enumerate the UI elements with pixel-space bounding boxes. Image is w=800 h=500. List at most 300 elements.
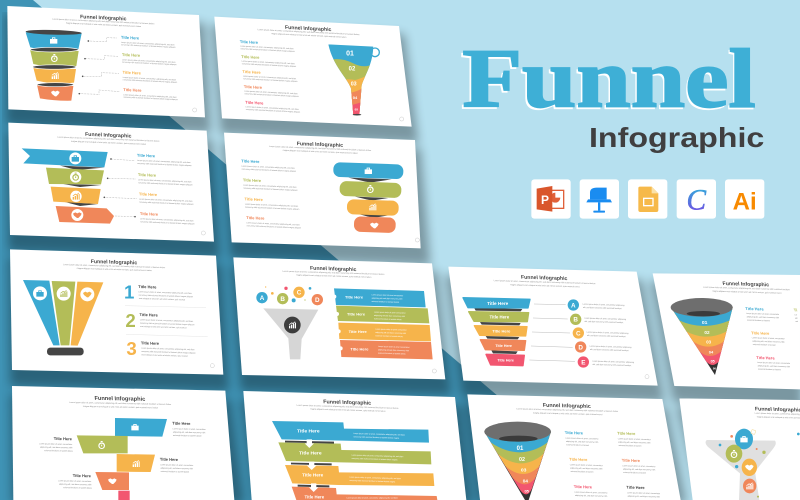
- title: Funnel: Funnel: [462, 33, 756, 125]
- stacked title panels: Title Here: [350, 346, 369, 351]
- text block 3: euismod tincidunt ut laoreet: [570, 470, 594, 474]
- text block 2: Lorem ipsum dolor sit amet, consectetur adipiscing elit, sed diam: [138, 178, 192, 183]
- stacked title panels: Title Here: [349, 329, 368, 334]
- heading: Lorem ipsum dolor sit amet, consectetur adipiscing elit, sed diam nonummy nibh euismod tincidunt ut laoreet dolore: [516, 407, 619, 413]
- text block 2: [241, 54, 297, 68]
- text block 3: [242, 69, 298, 83]
- stacked title panels: Lorem ipsum dolor sit amet consectetur: [374, 311, 406, 315]
- text block 2: Title Here: [122, 52, 141, 58]
- text block right 1: Lorem ipsum dolor sit amet, consectetur: [173, 427, 206, 431]
- text block left 1: [39, 436, 74, 453]
- text block 1: Title Here: [745, 306, 765, 312]
- text block 1: Lorem ipsum dolor sit amet, consectetur adipiscing elit, sed diam: [137, 159, 191, 164]
- flask funnel: 01: [346, 51, 354, 58]
- text block 1: nonummy nibh euismod tincidunt ut laoreet dolore magna aliquam: [242, 168, 297, 173]
- heading: Lorem ipsum dolor sit amet, consectetur adipiscing elit, sed diam nonummy nibh euismod tincidunt: [703, 286, 790, 291]
- text block 3: Lorem ipsum dolor sit amet, consectetur: [757, 361, 791, 365]
- text block 5: Lorem ipsum dolor sit amet, consectetur: [574, 491, 608, 494]
- text block 2: Title Here: [139, 312, 159, 318]
- stacked title panels: Lorem ipsum dolor sit amet consectetur: [378, 345, 410, 349]
- ribbon funnel: [22, 148, 114, 224]
- heading: Lorem ipsum dolor sit amet, consectetur adipiscing elit, sed diam nonummy nibh euismod tincidunt ut laoreet dolore: [63, 263, 166, 269]
- heading: [296, 398, 400, 413]
- text block 2: euismod tincidunt ut laoreet: [753, 343, 776, 347]
- cone: 02: [704, 330, 710, 335]
- text block 3: [141, 340, 196, 358]
- icon: Keynote: [580, 179, 619, 219]
- heading: Funnel Infographic: [94, 396, 146, 403]
- text block 3: nonummy nibh euismod tincidunt ut laoreet dolore magna aliquam: [245, 206, 300, 211]
- text block left 2: adipiscing elit, sed diam nonummy nibh: [59, 483, 92, 486]
- text block 4: Lorem ipsum dolor sit amet, consectetur: [622, 464, 656, 468]
- heading: Funnel Infographic: [285, 25, 332, 33]
- heading: magna aliquam erat volutpat ut wisi enim ad minim veniam, quis nostrud exerci tation: [71, 140, 146, 146]
- text block 2: Title Here: [243, 177, 262, 183]
- text block 2: Lorem ipsum dolor sit amet, consectetur: [752, 336, 785, 340]
- text block 1: [241, 158, 297, 173]
- text block 1: nonummy nibh euismod tincidunt ut laoreet dolore magna aliquam: [240, 47, 295, 53]
- cone: 04: [523, 479, 528, 484]
- stepped bars: [272, 421, 437, 500]
- text block 5: Title Here: [245, 100, 264, 106]
- stacked bars: Title Here: [492, 329, 511, 334]
- text block 5: [574, 484, 608, 498]
- text block 2: Title Here: [617, 431, 636, 436]
- text block 1: Lorem ipsum dolor sit amet, consectetur: [746, 312, 780, 316]
- stepped bars: Title Here: [299, 451, 322, 457]
- stacked title panels: Title Here: [345, 295, 364, 300]
- heading: Funnel Infographic: [543, 403, 591, 410]
- icon: Canva: C: [687, 184, 707, 216]
- leader lines: [103, 158, 137, 217]
- text block 1: [137, 153, 192, 167]
- text block 4: nonummy nibh euismod tincidunt ut laoreet dolore magna aliquam: [123, 96, 178, 101]
- text block 4: [622, 458, 657, 475]
- heading: Lorem ipsum dolor sit amet, consectetur adipiscing elit, sed diam nonummy nibh euismod tincidunt ut laoreet dolore: [296, 404, 400, 410]
- lettered circles: [568, 299, 589, 368]
- text block right 2: Title Here: [160, 457, 179, 462]
- cone: 02: [519, 457, 525, 463]
- text block 3: nonummy nibh euismod tincidunt ut laoreet dolore magna aliquam: [123, 78, 178, 84]
- text block 4: euismod tincidunt ut laoreet: [623, 471, 647, 475]
- panel: slide 8 stepped bars: [243, 391, 466, 500]
- cone: 03: [521, 468, 527, 474]
- text block 2: Lorem ipsum dolor sit amet, consectetur: [618, 437, 651, 441]
- text block left 2: [58, 473, 93, 490]
- panel: slide 3 ribbon funnel: [8, 123, 214, 242]
- cone: 05: [711, 359, 715, 363]
- grey funnel: [263, 308, 318, 359]
- text block 1: [121, 35, 176, 49]
- text block 2: [122, 52, 177, 66]
- heading: magna aliquam erat volutpat ut wisi enim ad minim veniam, quis nostrud exerci tation: [77, 267, 152, 272]
- heading: Funnel Infographic: [80, 14, 127, 22]
- text block 2: [139, 312, 195, 330]
- text block 4: eui: [795, 321, 799, 323]
- text block 5: [245, 100, 301, 114]
- text block 4: Lorem ipsum dolor sit amet, consectetur adipiscing elit, sed diam: [244, 90, 298, 95]
- text block 2: nonummy nibh euismod tincidunt ut laoreet dolore magna aliquam: [242, 62, 297, 68]
- stacked title panels: Title Here: [347, 312, 366, 317]
- text block 1: euismod tincidunt ut laoreet: [566, 443, 590, 447]
- text block 1: erat volutpat ut wisi enim ad minim veniam, quis nostrud: [139, 297, 185, 301]
- text block 2: [138, 172, 193, 187]
- heading: [282, 265, 386, 279]
- lettered circles: D: [578, 344, 583, 351]
- stepped bars: Title Here: [297, 429, 320, 435]
- text block 1: Title Here: [240, 39, 259, 45]
- heading: magna aliquam erat volutpat ut wisi enim ad minim veniam, quis nostrud exerci tation: [83, 405, 158, 409]
- heading: Lorem ipsum dolor sit amet, consectetur adipiscing elit, sed diam nonummy nibh euismod tincidunt ut laoreet dolore: [282, 270, 385, 276]
- text block 2: adipiscing elit, sed diam nonummy nibh: [752, 340, 785, 344]
- cone: 01: [517, 446, 524, 452]
- text block 2: nonummy nibh euismod tincidunt ut laoreet dolore magna aliquam: [138, 181, 193, 187]
- text block 3: Title Here: [242, 69, 262, 75]
- heading: [69, 395, 172, 410]
- text block 5: Lorem ipsum dolor sit amet, consectetur adipiscing elit, sed diam: [245, 105, 299, 111]
- cone: 04: [709, 349, 714, 354]
- body text rows: Lorem ipsum dolor sit amet, consectetur adipiscing: [582, 303, 625, 307]
- stacked title panels: [332, 288, 433, 359]
- text block 4: nonummy nibh euismod tincidunt ut laoreet dolore magna aliquam: [247, 224, 302, 230]
- body text rows: elit, sed diam nonummy nibh euismod tincidunt: [592, 363, 632, 367]
- heading: magna aliquam erat volutpat ut wisi enim ad minim veniam, quis nostrud exerci tation: [310, 408, 386, 413]
- heading: Lorem ipsum dolor sit amet, consectetur adipiscing elit, sed diam nonummy nibh euismod tincidunt ut laoreet dolore: [69, 401, 172, 406]
- body text rows: Lorem ipsum dolor sit amet, consectetur adipiscing: [592, 360, 634, 364]
- heading: [269, 140, 372, 155]
- text block 6: Title Here: [626, 485, 646, 490]
- body text rows: elit, sed diam nonummy nibh euismod tincidunt: [587, 334, 626, 338]
- text block 5: Title Here: [574, 484, 593, 489]
- flask funnel: 04: [353, 95, 358, 100]
- text block 1: euismod tincidunt ut laoreet: [747, 319, 771, 322]
- text block 2: Lorem ipsum dolor sit amet, consectetur adipiscing elit, sed diam: [243, 184, 297, 189]
- heading: Lorem ipsum dolor sit amet, consectetur adipiscing elit, sed diam nonummy nibh euismod tincidunt ut laoreet dolore: [494, 279, 597, 285]
- cone: 01: [702, 320, 708, 326]
- text block right 1: euismod tincidunt ut laoreet dolore: [173, 434, 202, 438]
- text block 1: Title Here: [138, 284, 157, 290]
- text block right 1: adipiscing elit, sed diam nonummy nibh: [173, 431, 205, 434]
- text block 3: euismod tincidunt ut laoreet: [758, 368, 782, 371]
- panel: slide 11 large cone funnel: [467, 394, 681, 500]
- text block 1: Title Here: [121, 35, 140, 41]
- heading: magna aliquam erat volutpat ut wisi enim ad minim veniam, quis nostrud exerci tation: [271, 32, 346, 39]
- text block 6: [626, 485, 661, 498]
- heading: [63, 258, 166, 273]
- text block 4: Title Here: [244, 84, 263, 90]
- cone: 03: [706, 339, 712, 344]
- heading: magna aliquam erat volutpat ut wisi enim ad minim veniam, quis nostrud exerci tation: [283, 149, 358, 155]
- lettered circles: B: [573, 317, 578, 324]
- text block 1: Lorem ipsum dolor sit amet, consectetur adipiscing elit, sed diam: [241, 165, 295, 170]
- text block 2: Title Here: [241, 54, 260, 60]
- text block 3: Lorem ipsum dolor sit amet, consectetur adipiscing elit, sed diam: [139, 198, 193, 203]
- cone: 06: [713, 366, 716, 370]
- connector lines: [529, 304, 575, 361]
- text block 3: Title Here: [141, 340, 160, 346]
- text block 1: Lorem ipsum dolor sit amet, consectetur: [565, 437, 599, 440]
- text block 1: adipiscing elit, sed diam nonummy nibh: [566, 440, 598, 444]
- text block 1: adipiscing elit, sed diam nonummy nibh: [746, 315, 779, 319]
- text block 2: Title Here: [751, 330, 770, 336]
- lettered circles: E: [581, 359, 585, 366]
- heading: Funnel Infographic: [310, 266, 357, 273]
- lettered circles: A: [260, 295, 265, 302]
- stacked title panels: adipiscing elit sed diam nonummy nibh: [374, 314, 405, 318]
- subtitle: Infographic: Infographic: [589, 122, 764, 153]
- text block right 2: euismod tincidunt ut laoreet dolore: [161, 470, 189, 474]
- flask funnel: 03: [351, 82, 357, 88]
- text block 2: adipiscing elit, sed diam nonummy nibh: [618, 441, 651, 444]
- text block 3: nonummy nibh euismod tincidunt ut laoreet dolore magna aliquam: [243, 77, 298, 83]
- text block 6: adipiscing elit, sed diam nonummy nibh: [627, 495, 660, 498]
- text block 1: [745, 306, 781, 323]
- title: Funnel: Funnel: [460, 35, 754, 127]
- text block left 1: Title Here: [54, 436, 73, 441]
- stacked title panels: euismod tincidunt ut laoreet dolore: [378, 352, 405, 355]
- panel: slide 10 cone funnel: [653, 273, 800, 389]
- text block 3: erat volutpat ut wisi enim ad minim veniam, quis nostrud: [141, 353, 188, 358]
- text block 3: [569, 457, 604, 474]
- text block 2: [751, 330, 786, 347]
- stacked title panels: adipiscing elit sed diam nonummy nibh: [378, 348, 409, 352]
- heading: Lorem ipsum dolor sit amet, consectetur adipiscing elit, sed diam nonummy nibh euismod tincidunt ut laoreet dolore: [269, 145, 372, 152]
- text block 2: euismod tincidunt ut laoreet: [618, 444, 642, 448]
- funnel: [26, 29, 82, 101]
- stepped bars: nonummy nibh euismod tincidunt ut laoreet dolore magna: [353, 435, 399, 440]
- flask funnel: [328, 44, 380, 116]
- numeral 3: 3: [126, 338, 137, 359]
- text block 4: Title Here: [246, 215, 265, 221]
- text block right 1: [172, 421, 207, 438]
- heading: Funnel Infographic: [85, 132, 132, 140]
- text block 5: adipiscing elit, sed diam nonummy nibh: [575, 494, 607, 498]
- heading: Lorem ipsum dolor sit amet, consectetur adipiscing elit, sed diam nonummy nibh euismod tincidunt ut laoreet dolore: [257, 28, 360, 36]
- stepped bars: Lorem ipsum dolor sit amet, consectetur adipiscing elit, sed diam: [347, 497, 398, 500]
- blade funnel: [23, 280, 103, 355]
- text block 4: nonummy nibh euismod tincidunt ut laoreet dolore magna aliquam: [244, 92, 299, 98]
- text block 3: Title Here: [123, 70, 142, 76]
- lettered circles: A: [571, 302, 576, 309]
- text block 3: Title Here: [139, 191, 158, 197]
- text block 4: [246, 215, 302, 230]
- heading: magna aliquam erat volutpat ut wisi enim ad minim veniam, quis nostrud exerci: [510, 283, 580, 288]
- panel: slide 12 funnel with icon bubbles: [679, 398, 800, 500]
- icon: Illustrator: [725, 179, 764, 219]
- text block left 1: euismod tincidunt ut laoreet dolore: [44, 449, 73, 453]
- text block 2: nonummy nibh euismod tincidunt ut laoreet dolore magna aliquam: [243, 187, 298, 192]
- text block 1: nonummy nibh euismod tincidunt ut laoreet dolore magna aliquam: [139, 294, 194, 298]
- text block 3: [139, 191, 194, 206]
- stacked title panels: adipiscing elit sed diam nonummy nibh: [375, 331, 406, 335]
- text block 1: Title Here: [137, 153, 156, 158]
- heading: magna aliquam erat volutpat ut wisi enim ad minim veniam, quis nostrud exerci tation: [66, 22, 141, 28]
- text block 1: nonummy nibh euismod tincidunt ut laoreet dolore magna aliquam: [137, 162, 192, 167]
- text block 4: Title Here: [622, 458, 641, 463]
- text block 3: Lorem ipsum dolor sit amet, consectetur adipiscing elit, sed diam: [245, 203, 299, 208]
- staggered bands: [77, 418, 167, 500]
- icon: PowerPoint: [531, 179, 571, 219]
- heading: [57, 131, 160, 146]
- text block 6: Lorem ipsum dolor sit amet, consectetur: [627, 491, 661, 495]
- flask funnel: 02: [349, 67, 356, 73]
- text block 2: [243, 177, 298, 192]
- text block 3: Lorem ipsum dolor sit amet, consectetur adipiscing elit, sed diam: [123, 76, 177, 82]
- pill funnel: [333, 162, 404, 233]
- numeral 1: 1: [124, 282, 134, 303]
- text block left 2: euismod tincidunt ut laoreet dolore: [63, 486, 92, 490]
- heading: Funnel Infographic: [521, 275, 568, 282]
- text block 4: Lor: [794, 314, 798, 316]
- stacked bars: Title Here: [497, 358, 514, 362]
- text block 1: [138, 284, 194, 302]
- text block 2: Lorem ipsum dolor sit amet, consectetur adipiscing elit, sed diam: [241, 60, 295, 65]
- text block 2: Lorem ipsum dolor sit amet, consectetur adipiscing elit, sed diam: [140, 318, 194, 323]
- stepped bars: nonummy nibh euismod tincidunt ut laoreet dolore magna: [352, 457, 397, 461]
- text block 3: Lorem ipsum dolor sit amet, consectetur adipiscing elit, sed diam: [141, 347, 195, 351]
- heading: Funnel Infographic: [91, 259, 137, 266]
- text block 1: Lorem ipsum dolor sit amet, consectetur adipiscing elit, sed diam: [240, 45, 294, 50]
- heading: [257, 24, 361, 40]
- heading: [516, 402, 620, 417]
- stepped bars: Title Here: [302, 473, 324, 478]
- text block 1: nonummy nibh euismod tincidunt ut laoreet dolore magna aliquam: [121, 43, 176, 49]
- background: dark blue diagonal: [0, 0, 620, 500]
- cone: [671, 298, 733, 375]
- text block 3: nonummy nibh euismod tincidunt ut laoreet dolore magna aliquam: [139, 201, 194, 206]
- stacked bars: Title Here: [487, 301, 509, 306]
- flask funnel: 05: [355, 107, 358, 111]
- text block 2: erat volutpat ut wisi enim ad minim veniam, quis nostrud: [140, 325, 186, 329]
- heading: magna aliquam erat volutpat ut wisi enim ad minim veniam, quis nostrud exerci tation: [296, 274, 371, 279]
- body text rows: elit, sed diam nonummy nibh euismod tincidunt: [584, 320, 624, 324]
- lettered circles: B: [280, 296, 285, 303]
- text block 4: Lorem ipsum dolor sit amet, consectetur adipiscing elit, sed diam: [123, 93, 177, 99]
- heading: Funnel Infographic: [722, 281, 770, 288]
- text block left 1: adipiscing elit, sed diam nonummy nibh: [40, 446, 73, 449]
- text block right 2: Lorem ipsum dolor sit amet, consectetur: [160, 463, 194, 467]
- text block 4: adipiscing elit, sed diam nonummy nibh: [623, 468, 655, 471]
- stacked title panels: adipiscing elit sed diam nonummy nibh: [372, 297, 403, 301]
- text block right 2: [160, 457, 194, 474]
- heading: magna aliquam erat volutpat ut wisi enim ad minim veniam, quis nostrud exerci: [533, 411, 603, 416]
- stepped bars: Lorem ipsum dolor sit amet, consectetur adipiscing elit, sed diam: [352, 454, 404, 458]
- panel: slide 5 numbered funnel: [10, 249, 223, 375]
- icon: Google Slides: [628, 179, 667, 219]
- text block 1: [565, 430, 600, 447]
- text block left 2: Lorem ipsum dolor sit amet, consectetur: [58, 479, 92, 483]
- body text rows: Lorem ipsum dolor sit amet, consectetur adipiscing: [584, 317, 626, 321]
- text block 3: Title Here: [244, 196, 264, 202]
- text block 3: [244, 196, 300, 211]
- text block 1: Lorem ipsum dolor sit amet, consectetur adipiscing elit, sed diam: [121, 41, 175, 47]
- text block 3: Lorem ipsum dolor sit amet, consectetur adipiscing elit, sed diam: [243, 75, 297, 80]
- stepped bars: Lorem ipsum dolor sit amet, consectetur adipiscing elit, sed diam: [349, 476, 401, 480]
- text block left 1: Lorem ipsum dolor sit amet, consectetur: [39, 442, 73, 446]
- text block 2: [617, 431, 652, 448]
- stacked title panels: Lorem ipsum dolor sit amet consectetur: [372, 293, 404, 297]
- panel: slide 2 flask funnel: [214, 17, 412, 133]
- lettered circles: C: [576, 330, 581, 337]
- body text rows: Lorem ipsum dolor sit amet, consectetur adipiscing: [586, 331, 629, 335]
- text block right 1: Title Here: [172, 421, 191, 426]
- heading: [702, 280, 791, 295]
- stepped bars: Title Here: [305, 495, 325, 500]
- text block 1: [240, 39, 295, 53]
- stacked bars: [463, 298, 530, 366]
- text block 3: [123, 70, 178, 84]
- text block 3: Lorem ipsum dolor sit amet, consectetur: [570, 463, 603, 467]
- text block 4: Lorem ipsum dolor sit amet, consectetur adipiscing elit, sed diam: [246, 221, 300, 226]
- text block 4: [123, 87, 178, 101]
- lettered circles: [256, 286, 323, 305]
- stacked title panels: euismod tincidunt ut laoreet dolore: [374, 317, 401, 321]
- stacked title panels: euismod tincidunt ut laoreet dolore: [375, 334, 403, 338]
- leader lines: [78, 38, 120, 94]
- icon: Canva: [677, 179, 716, 219]
- text block 3: [756, 355, 792, 372]
- heading: [754, 406, 800, 420]
- text block 2: Title Here: [138, 172, 157, 178]
- text block 4: Title Here: [123, 87, 142, 93]
- text block 3: adipiscing elit, sed diam nonummy nibh: [757, 364, 790, 368]
- body text rows: Lorem ipsum dolor sit amet, consectetur adipiscing: [589, 345, 632, 349]
- text block 4: Lorem ipsum dolor sit amet, consectetur adipiscing elit, sed diam: [140, 217, 194, 222]
- text block 5: nonummy nibh euismod tincidunt ut laoreet dolore magna aliquam: [246, 108, 301, 114]
- body text rows: [582, 303, 635, 367]
- bubble funnel: [706, 429, 800, 500]
- body text rows: elit, sed diam nonummy nibh euismod tincidunt: [590, 348, 629, 352]
- panel: slide 7 staggered funnel: [12, 386, 234, 500]
- panel: slide 1 layered funnel: [7, 6, 205, 117]
- panel: slide 9 lettered bars: [448, 267, 658, 386]
- text block 3: Title Here: [756, 355, 776, 361]
- stacked bars: Title Here: [490, 315, 510, 320]
- heading: [52, 13, 155, 29]
- text block 4: adi: [795, 318, 798, 320]
- heading: [493, 274, 597, 289]
- icon: PowerPoint: P: [541, 193, 549, 207]
- text block 3: nonummy nibh euismod tincidunt ut laoreet dolore magna aliquam: [141, 350, 196, 355]
- stepped bars: nonummy nibh euismod tincidunt ut laoreet dolore magna: [349, 479, 395, 483]
- stacked bars: Title Here: [495, 344, 512, 348]
- text block 3: Title Here: [569, 457, 588, 462]
- heading: Lorem ipsum dolor sit amet, consectetur adipiscing elit, sed diam nonummy nibh euismod tincidunt ut laoreet dolore: [57, 136, 160, 143]
- text block 1: Title Here: [241, 158, 260, 164]
- lettered circles: D: [315, 297, 320, 304]
- panel: slide 6 grey funnel with letters: [233, 257, 445, 379]
- cone: [484, 422, 551, 500]
- text block 4: [140, 211, 195, 226]
- text block 1: Title Here: [565, 430, 584, 435]
- text block 3: adipiscing elit, sed diam nonummy nibh: [570, 467, 603, 470]
- heading: magna aliquam erat volutpat ut wisi enim ad minim veniam, quis nostrud exerci: [712, 290, 782, 295]
- heading: Funnel Infographic: [323, 399, 371, 407]
- stacked title panels: euismod tincidunt ut laoreet dolore: [372, 300, 399, 304]
- text block right 2: adipiscing elit, sed diam nonummy nibh: [160, 467, 193, 470]
- text block 2: Lorem ipsum dolor sit amet, consectetur adipiscing elit, sed diam: [122, 58, 176, 64]
- numeral 2: 2: [125, 310, 136, 331]
- icon: Illustrator: Ai: [733, 188, 757, 215]
- text block 4: [793, 307, 799, 323]
- heading: Funnel Infographic: [297, 141, 343, 149]
- lettered circles: C: [297, 290, 302, 297]
- cone: 05: [524, 488, 530, 493]
- text block left 2: Title Here: [73, 473, 92, 478]
- text block 2: nonummy nibh euismod tincidunt ut laoreet dolore magna aliquam: [140, 322, 195, 326]
- text block 4: Ti: [793, 307, 798, 312]
- text block 4: Title Here: [140, 211, 159, 217]
